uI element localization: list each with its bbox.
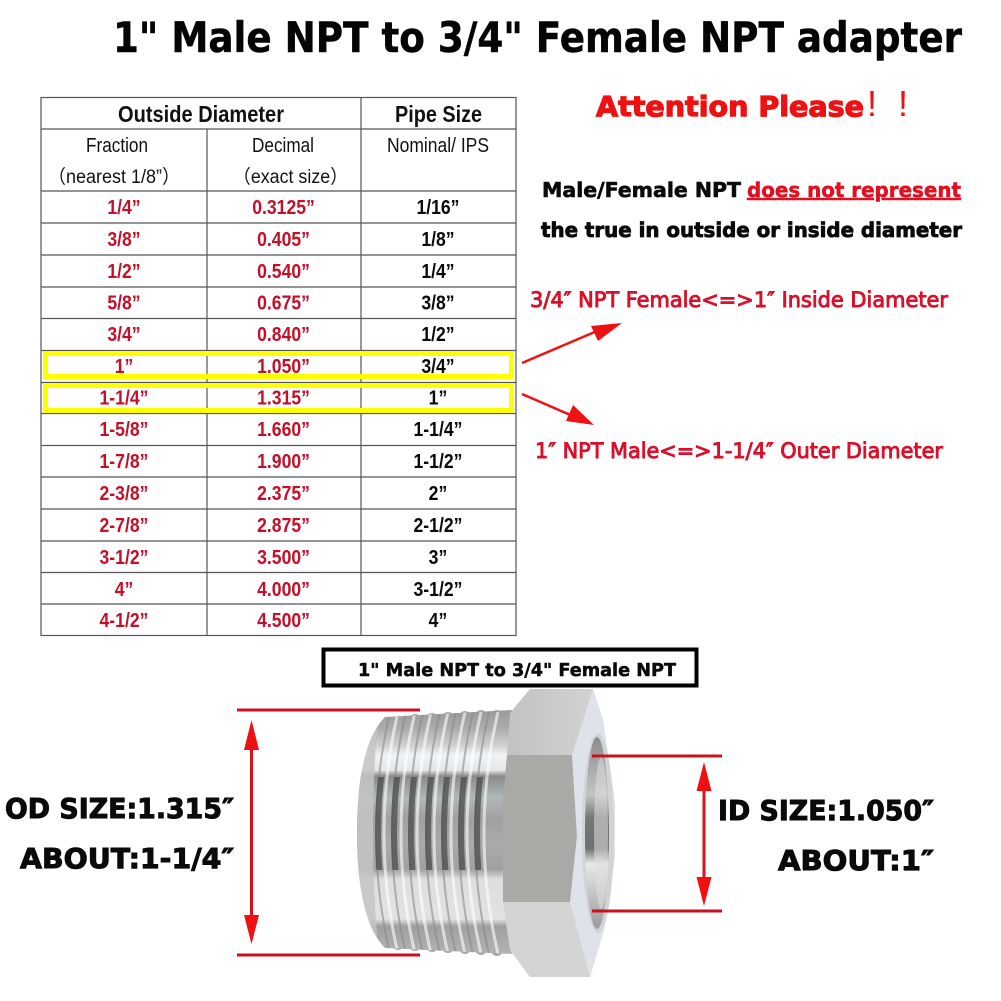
hex nut <box>510 689 615 977</box>
table header: Nominal/ IPS <box>387 135 489 157</box>
ID label <box>718 794 934 877</box>
hex centre face <box>503 755 577 902</box>
table header: Outside Diameter <box>118 101 284 127</box>
ID dimension <box>592 756 722 911</box>
table rows: 3/4” <box>107 323 141 345</box>
fitting illustration <box>350 689 615 977</box>
table rows: 0.405” <box>257 228 310 250</box>
table rows: 1-1/2” <box>414 450 462 472</box>
OD label: ABOUT:1-1/4″ <box>20 842 234 875</box>
attention heading <box>596 83 908 124</box>
table rows: 1.050” <box>257 355 310 377</box>
table rows: 4.500” <box>257 609 310 631</box>
table rows: 1-7/8” <box>100 450 148 472</box>
table rows: 0.840” <box>257 323 310 345</box>
ID label: ID SIZE:1.050″ <box>718 794 934 827</box>
table rows: 3-1/2” <box>100 546 148 568</box>
OD label: OD SIZE:1.315″ <box>5 792 234 825</box>
OD dimension <box>237 710 420 955</box>
table rows: 4.000” <box>257 578 310 600</box>
warning note: the true in outside or inside diameter <box>541 218 962 242</box>
table rows: 1” <box>115 355 133 377</box>
warning note: does not represent <box>747 178 961 202</box>
table rows: 4” <box>429 609 447 631</box>
yellow highlight boxes <box>46 354 512 410</box>
hex end chamfer <box>570 689 615 977</box>
table rows: 1.900” <box>257 450 310 472</box>
table rows: 1” <box>429 386 447 409</box>
table rows: 3-1/2” <box>414 578 462 600</box>
table rows: 2-3/8” <box>100 482 148 504</box>
table rows: 1-1/4” <box>100 386 148 409</box>
ID label: ABOUT:1″ <box>778 844 934 877</box>
attention heading: ! <box>867 83 877 124</box>
table rows: 3/8” <box>421 291 455 314</box>
OD label <box>5 792 234 875</box>
warning note: Male/Female NPT <box>542 178 741 202</box>
table rows: 3.500” <box>257 546 310 568</box>
table rows: 5/8” <box>107 291 141 314</box>
attention heading: ! <box>898 83 908 124</box>
table header: （exact size） <box>233 166 348 188</box>
table header <box>48 101 489 188</box>
table header: Fraction <box>86 135 148 157</box>
table rows: 1/4” <box>421 260 455 282</box>
table header: Decimal <box>252 135 314 157</box>
callout: female: 3/4″ NPT Female<=>1″ Inside Diameter <box>530 288 948 312</box>
threaded body <box>350 708 515 956</box>
table header: Pipe Size <box>395 101 482 127</box>
table rows: 1.660” <box>257 418 310 440</box>
table rows: 1-1/4” <box>414 418 462 440</box>
table rows: 2.875” <box>257 514 310 536</box>
table rows: 2-7/8” <box>100 514 148 536</box>
callout: male: 1″ NPT Male<=>1-1/4″ Outer Diameter <box>535 439 943 463</box>
table rows: 1/2” <box>421 323 455 345</box>
table rows: 2” <box>429 482 447 504</box>
attention heading: Attention Please <box>596 90 864 123</box>
table rows: 1/8” <box>421 228 455 250</box>
table rows: 4-1/2” <box>100 609 148 631</box>
hex top face <box>507 689 593 755</box>
arrow: to male callout <box>522 394 594 425</box>
product label box <box>324 650 696 686</box>
table rows: 2-1/2” <box>414 514 462 536</box>
table rows: 3/4” <box>421 355 455 377</box>
table rows: 3/8” <box>107 228 141 250</box>
arrow: to female callout <box>522 323 622 363</box>
table grid <box>41 98 516 636</box>
table rows: 4” <box>115 578 133 600</box>
table rows: 1.315” <box>257 386 310 409</box>
table rows: 0.3125” <box>252 196 315 218</box>
thread crests <box>392 710 503 956</box>
warning note <box>541 178 962 242</box>
table header: （nearest 1/8”） <box>48 166 180 188</box>
table rows: 0.675” <box>257 291 310 314</box>
table rows: 2.375” <box>257 482 310 504</box>
table rows <box>100 196 462 631</box>
product label box: 1" Male NPT to 3/4" Female NPT <box>358 660 677 681</box>
bore <box>582 733 614 933</box>
table rows: 1/2” <box>107 260 141 282</box>
table rows: 1/4” <box>107 196 141 218</box>
table: pipe size chart <box>41 98 516 636</box>
table rows: 0.540” <box>257 260 310 282</box>
table rows: 3” <box>429 546 447 568</box>
table rows: 1-5/8” <box>100 418 148 440</box>
table rows: 1/16” <box>416 196 459 218</box>
hex bottom face <box>503 902 590 977</box>
